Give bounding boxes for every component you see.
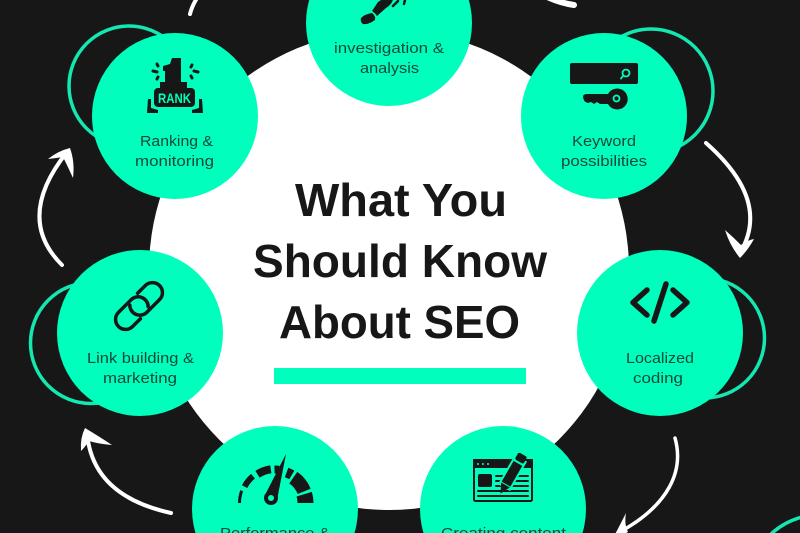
label: monitoring	[135, 153, 214, 170]
step: keyword possibilities	[521, 29, 713, 199]
icon: hand	[361, 0, 405, 24]
icon: number one rank: RANK	[158, 90, 191, 106]
label: Ranking &	[140, 133, 213, 150]
icon: browser window and pencil	[473, 451, 533, 501]
icon: chain link	[111, 278, 167, 334]
label: possibilities	[561, 153, 647, 170]
icon: speedometer	[240, 454, 306, 505]
label: Localized	[626, 350, 694, 367]
arrow: investigation to keyword (cropped)	[545, 0, 574, 5]
title underline bar	[274, 368, 526, 384]
title: What You	[295, 174, 507, 226]
title	[253, 174, 547, 348]
arrow: performance to link building	[81, 428, 171, 513]
arrow: keyword to localized	[706, 143, 754, 258]
label: analysis	[360, 60, 419, 77]
arrow: localized to creating content	[612, 438, 678, 533]
decorative ring	[69, 26, 189, 146]
decorative ring	[589, 29, 713, 153]
label	[87, 350, 194, 387]
label: Keyword	[572, 133, 636, 150]
decorative ring	[30, 282, 152, 404]
step: creating content	[420, 426, 586, 533]
icon: number one rank	[147, 58, 203, 113]
step: link building and marketing	[30, 250, 223, 416]
label: coding	[633, 370, 683, 387]
label	[561, 133, 647, 170]
label	[626, 350, 694, 387]
cropped ring at bottom right corner	[771, 517, 800, 533]
step: ranking and monitoring	[69, 26, 258, 199]
icon: search bar and key	[570, 63, 638, 110]
decorative ring	[644, 278, 764, 398]
label	[334, 40, 444, 77]
title: About SEO	[279, 296, 520, 348]
label: Link building &	[87, 350, 194, 367]
arrow: ranking to investigation (cropped)	[190, 0, 197, 14]
label: investigation &	[334, 40, 444, 57]
title: Should Know	[253, 235, 547, 287]
label: marketing	[103, 370, 177, 387]
label	[135, 133, 214, 170]
step: localized coding	[577, 250, 764, 416]
step: investigation and analysis	[306, 0, 472, 106]
central white circle	[149, 30, 629, 510]
arrow: link building to ranking	[39, 148, 74, 265]
icon: code brackets	[633, 284, 687, 321]
step: performance	[192, 426, 358, 533]
